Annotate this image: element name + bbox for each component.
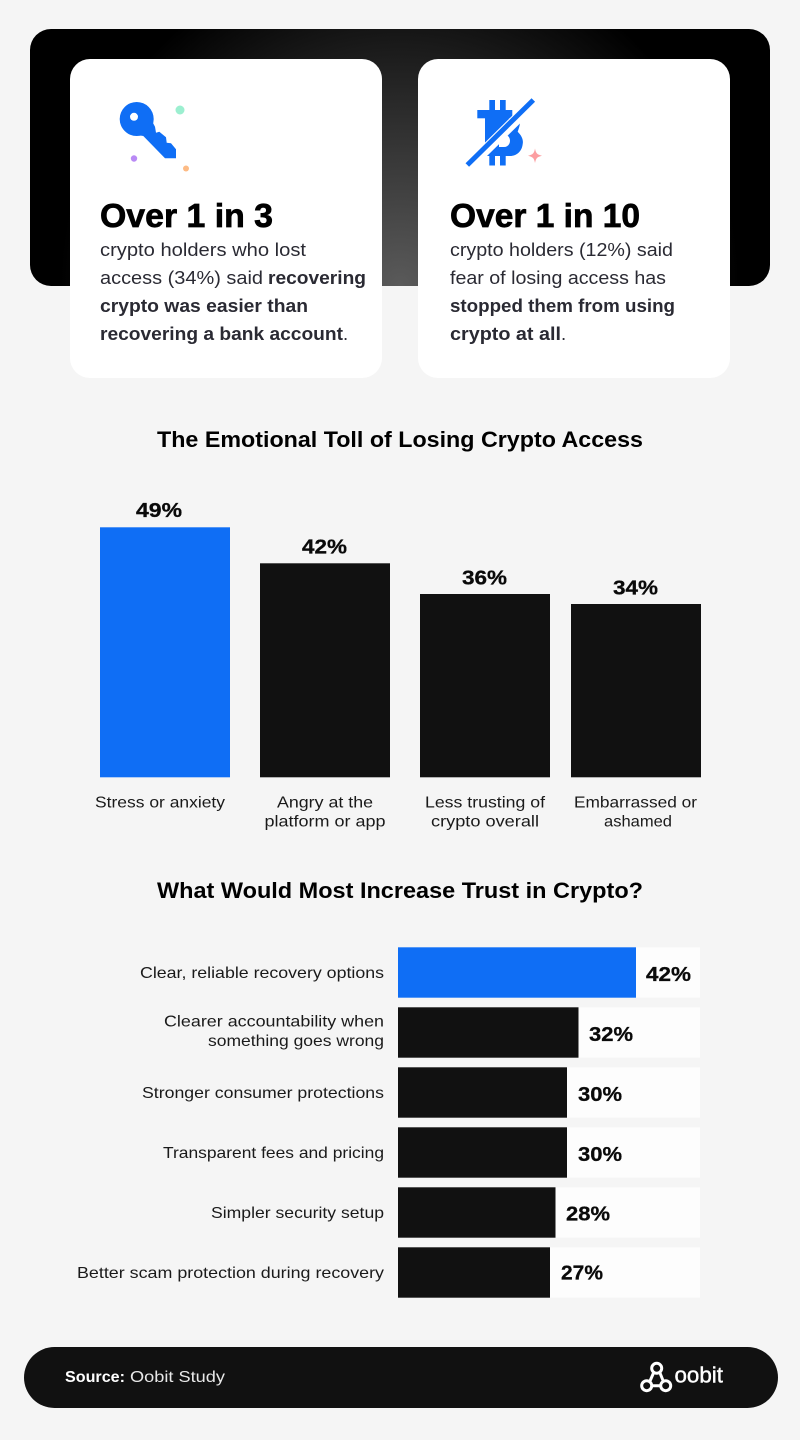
bar: less trusting 36%: 36%: [462, 566, 507, 590]
bar: less trusting 36%: [420, 566, 550, 831]
stat heading: Over 1 in 3: [100, 197, 273, 234]
bar chart: trust factors: [77, 947, 700, 1298]
row: accountability 32%: [164, 1007, 700, 1058]
row: fees 30%: [163, 1127, 700, 1178]
bar: less trusting 36%: crypto overall: [431, 814, 539, 831]
logo: oobit: [642, 1362, 723, 1391]
heading: emotional toll: The Emotional Toll of Losing Crypto Access: [157, 427, 643, 452]
stat description: [100, 239, 366, 344]
source text: [65, 1369, 225, 1386]
row: accountability 32%: something goes wrong: [208, 1033, 384, 1050]
row: security setup 28%: Simpler security setup: [211, 1205, 384, 1222]
stat description: .: [561, 323, 566, 344]
stat description: .: [343, 323, 348, 344]
row: security setup 28%: [211, 1187, 700, 1238]
stat description: access (34%) said: [100, 267, 263, 288]
icon: key: [120, 102, 189, 172]
stat description: crypto at all: [450, 323, 561, 344]
icon: crossed-out bitcoin: [467, 99, 542, 166]
row: consumer protections 30%: Stronger consumer protections: [142, 1085, 384, 1102]
bar chart: emotional toll: [95, 499, 701, 831]
stat description: recovering a bank account: [100, 323, 343, 344]
bar: embarrassed 34%: ashamed: [604, 814, 672, 831]
stat heading: Over 1 in 10: [450, 197, 640, 234]
panel: recovery stat card: [70, 59, 382, 378]
panel: fear stat card: [418, 59, 730, 378]
footer bar: [24, 1347, 778, 1408]
heading: trust: What Would Most Increase Trust in Crypto?: [157, 878, 643, 903]
row: recovery options 42%: Clear, reliable recovery options: [140, 965, 384, 982]
bar: stress or anxiety 49%: 49%: [136, 499, 182, 522]
row: accountability 32%: Clearer accountability when: [164, 1014, 384, 1030]
row: recovery options 42%: 42%: [646, 963, 691, 986]
logo: oobit: oobit: [674, 1362, 723, 1387]
dark header panel: [30, 29, 770, 286]
bar: stress or anxiety 49%: [95, 499, 230, 811]
row: consumer protections 30%: [142, 1067, 700, 1118]
bar: angry 42%: 42%: [302, 536, 347, 558]
bar: angry 42%: Angry at the: [277, 794, 373, 811]
row: fees 30%: 30%: [578, 1143, 622, 1166]
row: scam protection 27%: [77, 1247, 700, 1298]
row: recovery options 42%: [140, 947, 700, 998]
bar: embarrassed 34%: 34%: [613, 576, 658, 600]
stat description: stopped them from using: [450, 295, 675, 316]
source text: Source:: [65, 1369, 125, 1386]
stat description: crypto holders who lost: [100, 239, 306, 260]
row: consumer protections 30%: 30%: [578, 1083, 622, 1106]
row: scam protection 27%: 27%: [561, 1262, 603, 1284]
row: security setup 28%: 28%: [566, 1202, 610, 1226]
bar: angry 42%: platform or app: [264, 814, 386, 831]
stat description: crypto was easier than: [100, 295, 308, 316]
bar: embarrassed 34%: Embarrassed or: [574, 794, 698, 811]
stat description: crypto holders (12%) said: [450, 239, 673, 260]
row: fees 30%: Transparent fees and pricing: [163, 1145, 384, 1162]
row: scam protection 27%: Better scam protection during recovery: [77, 1265, 384, 1282]
source text: Oobit Study: [130, 1369, 225, 1386]
stat description: [450, 239, 675, 344]
stat description: fear of losing access has: [450, 267, 666, 288]
row: accountability 32%: 32%: [589, 1023, 633, 1046]
bar: stress or anxiety 49%: Stress or anxiety: [95, 794, 225, 811]
stat description: recovering: [268, 267, 366, 288]
bar: less trusting 36%: Less trusting of: [425, 794, 546, 811]
bar: embarrassed 34%: [571, 576, 701, 831]
bar: angry 42%: [260, 536, 390, 831]
